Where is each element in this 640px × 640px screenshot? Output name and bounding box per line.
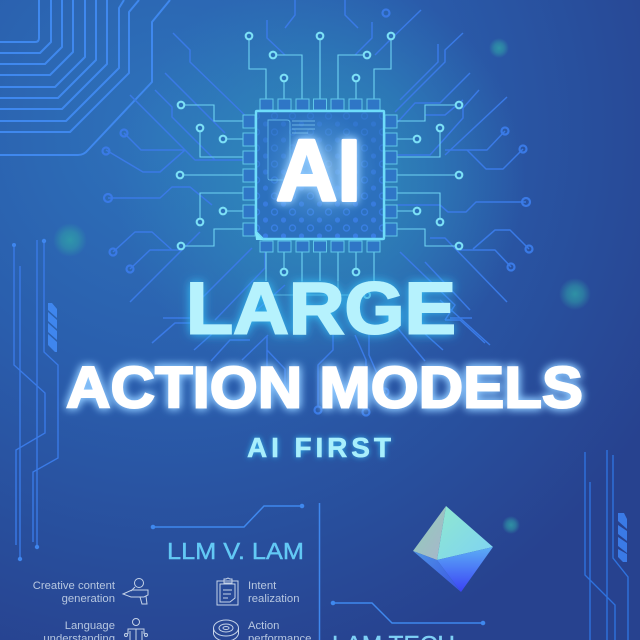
- chip traces: [180, 36, 459, 295]
- text: creative content generation: [33, 580, 116, 605]
- heading: LLM V. LAM: [167, 538, 304, 564]
- icon: person reading: [124, 618, 148, 640]
- icon: robot vacuum: [214, 620, 238, 640]
- chip pads: [243, 99, 397, 252]
- text: action performance: [248, 620, 311, 640]
- side circuit: right: [585, 450, 628, 640]
- text: action performance: Action: [248, 620, 279, 632]
- text: creative content generation: Creative content: [33, 580, 116, 592]
- circuit lines: top left corner: [0, 0, 170, 155]
- chip terminal nodes: [177, 33, 462, 298]
- title: ACTION MODELS: ACTION MODELS: [66, 356, 583, 420]
- panel: LLM v. LAM: [33, 504, 311, 640]
- chip body: [255, 111, 384, 240]
- heading ornament: [331, 601, 485, 625]
- text: intent realization: [248, 580, 300, 605]
- chip label: AI: [276, 122, 361, 220]
- text: intent realization: Intent: [248, 580, 277, 592]
- glowing teal blobs: [53, 38, 591, 534]
- text: creative content generation: generation: [62, 593, 115, 605]
- side circuit: left: [12, 239, 58, 561]
- subtitle: AI FIRST: AI FIRST: [247, 432, 391, 463]
- title: LARGE: LARGE: [186, 268, 456, 350]
- text: language understanding: Language: [65, 620, 115, 632]
- text: intent realization: realization: [248, 593, 300, 605]
- background circuit nodes: [102, 10, 532, 416]
- text: language understanding: [43, 620, 115, 640]
- icon: AI microchip: [177, 33, 462, 298]
- background circuit traces around chip: [106, 0, 529, 408]
- vertical divider: [318, 503, 320, 640]
- heading ornament: [151, 504, 304, 529]
- panel: LAM tech: [331, 601, 485, 640]
- icon: clipboard: [217, 578, 238, 605]
- icon: octahedron gem: [413, 506, 493, 592]
- icon: pen tool: [123, 578, 148, 604]
